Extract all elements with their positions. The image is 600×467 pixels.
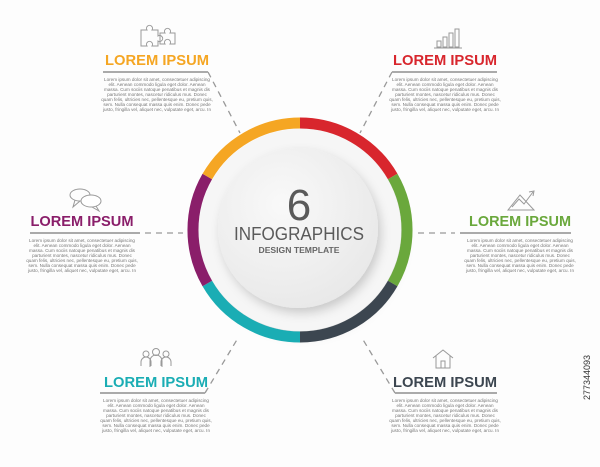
panel: middle-right: Lorem ipsum dolor sit amet, consectetuer adipiscing xyxy=(467,238,573,243)
panel: top-left: Lorem ipsum dolor sit amet, consectetuer adipiscing xyxy=(104,77,210,82)
panel: middle-left: LOREM IPSUM xyxy=(30,213,134,230)
panel: top-right: LOREM IPSUM xyxy=(393,52,497,69)
panel: bottom-right: elit. Aenean commodo ligula eget dolor. Aenean xyxy=(396,403,494,408)
connectors xyxy=(145,72,455,393)
panel: bottom-right xyxy=(389,350,501,433)
panel: bottom-right: parturient montes, nascetur ridiculus mus. Donec xyxy=(395,413,496,418)
panel: middle-left: justo, fringilla vel, aliquet nec, vulputate eget, arcu. In xyxy=(27,268,136,273)
center disc: DESIGN TEMPLATE xyxy=(258,246,340,255)
panel: top-left: justo, fringilla vel, aliquet nec, vulputate eget, arcu. In xyxy=(102,107,211,112)
icon: people xyxy=(141,348,171,367)
panel: middle-left: parturient montes, nascetur ridiculus mus. Donec xyxy=(32,253,133,258)
center disc: INFOGRAPHICS xyxy=(234,224,364,244)
panel: bottom-left: Lorem ipsum dolor sit amet, consectetuer adipiscing xyxy=(103,398,209,403)
panel: top-left: parturient montes, nascetur ridiculus mus. Donec xyxy=(107,92,208,97)
watermark id: 277344093 xyxy=(582,355,592,400)
panel: bottom-left: parturient montes, nascetur ridiculus mus. Donec xyxy=(106,413,207,418)
icon: puzzle xyxy=(141,25,175,46)
center disc xyxy=(218,148,378,308)
panel: middle-left xyxy=(26,189,140,273)
panel: bottom-left: sem. Nulla consequat massa quis enim. Donec pede xyxy=(102,423,210,428)
panel: middle-right: justo, fringilla vel, aliquet nec, vulputate eget, arcu. In xyxy=(465,268,574,273)
panel: bottom-right: quam felis, ultricies nec, pellentesque eu, pretium quis, xyxy=(389,418,501,423)
panel: top-right: justo, fringilla vel, aliquet nec, vulputate eget, arcu. In xyxy=(390,107,499,112)
panel: bottom-left: elit. Aenean commodo ligula eget dolor. Aenean xyxy=(107,403,205,408)
icon: house xyxy=(433,350,453,368)
panel: middle-right: quam felis, ultricies nec, pellentesque eu, pretium quis, xyxy=(464,258,576,263)
icon: mountain chart xyxy=(508,191,534,210)
panel: middle-left: quam felis, ultricies nec, pellentesque eu, pretium quis, xyxy=(26,258,138,263)
panel: middle-right: massa. Cum sociis natoque penatibus et magnis dis xyxy=(467,248,574,253)
panel: top-left: sem. Nulla consequat massa quis enim. Donec pede xyxy=(103,102,211,107)
panel: bottom-right: justo, fringilla vel, aliquet nec, vulputate eget, arcu. In xyxy=(390,428,499,433)
panel: bottom-left: massa. Cum sociis natoque penatibus et magnis dis xyxy=(103,408,210,413)
panel: top-right: sem. Nulla consequat massa quis enim. Donec pede xyxy=(391,102,499,107)
panel: bottom-left: quam felis, ultricies nec, pellentesque eu, pretium quis, xyxy=(100,418,212,423)
panel: top-right: elit. Aenean commodo ligula eget dolor. Aenean xyxy=(396,82,494,87)
panel: top-left: quam felis, ultricies nec, pellentesque eu, pretium quis, xyxy=(101,97,213,102)
panel: bottom-right: massa. Cum sociis natoque penatibus et magnis dis xyxy=(392,408,499,413)
panel: bottom-right: Lorem ipsum dolor sit amet, consectetuer adipiscing xyxy=(392,398,498,403)
panel: bottom-left: justo, fringilla vel, aliquet nec, vulputate eget, arcu. In xyxy=(101,428,210,433)
panel: bottom-right: sem. Nulla consequat massa quis enim. Donec pede xyxy=(391,423,499,428)
panel: top-left xyxy=(101,25,213,112)
panel: middle-left: Lorem ipsum dolor sit amet, consectetuer adipiscing xyxy=(29,238,135,243)
panel: top-left: elit. Aenean commodo ligula eget dolor. Aenean xyxy=(108,82,206,87)
panel: top-right: quam felis, ultricies nec, pellentesque eu, pretium quis, xyxy=(389,97,501,102)
panel: bottom-left: LOREM IPSUM xyxy=(104,374,208,391)
panel: top-left: LOREM IPSUM xyxy=(105,52,209,69)
panel: bottom-right: LOREM IPSUM xyxy=(393,374,497,391)
panel: top-right: massa. Cum sociis natoque penatibus et magnis dis xyxy=(392,87,499,92)
center disc: 6 xyxy=(287,181,311,230)
panel: top-right: parturient montes, nascetur ridiculus mus. Donec xyxy=(395,92,496,97)
panel: top-right: Lorem ipsum dolor sit amet, consectetuer adipiscing xyxy=(392,77,498,82)
panel: middle-right xyxy=(460,191,576,273)
panel: middle-right: LOREM IPSUM xyxy=(469,213,571,230)
icon: speech bubbles xyxy=(70,189,101,211)
panel: middle-right: sem. Nulla consequat massa quis enim. Donec pede xyxy=(466,263,574,268)
ring chart xyxy=(193,123,407,337)
panel: bottom-left xyxy=(100,348,212,433)
panel: middle-left: elit. Aenean commodo ligula eget dolor. Aenean xyxy=(33,243,131,248)
panel: top-left: massa. Cum sociis natoque penatibus et magnis dis xyxy=(104,87,211,92)
panel: top-right xyxy=(389,29,501,112)
panel: middle-right: elit. Aenean commodo ligula eget dolor. Aenean xyxy=(471,243,569,248)
icon: bar chart xyxy=(434,29,462,48)
panel: middle-left: sem. Nulla consequat massa quis enim. Donec pede xyxy=(28,263,136,268)
panel: middle-left: massa. Cum sociis natoque penatibus et magnis dis xyxy=(29,248,136,253)
panel: middle-right: parturient montes, nascetur ridiculus mus. Donec xyxy=(470,253,571,258)
